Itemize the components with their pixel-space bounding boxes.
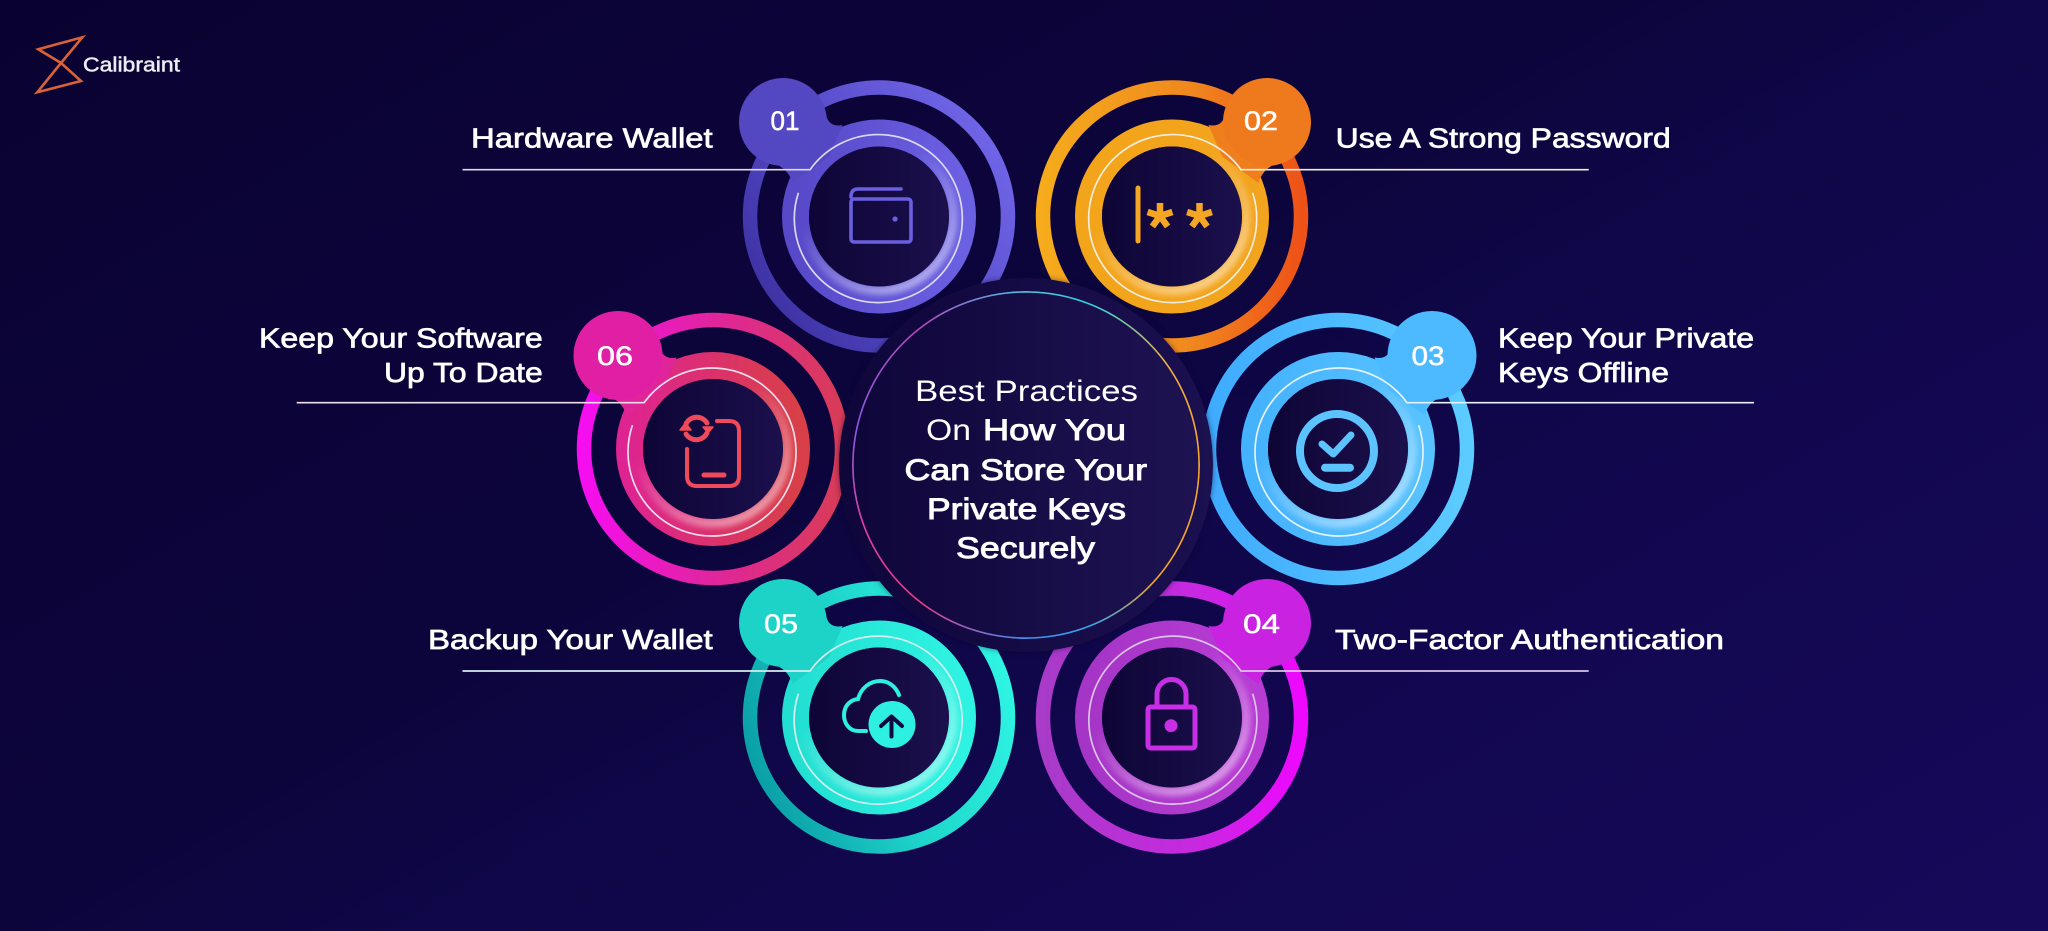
label 03 line 1: Keep Your Private	[1498, 322, 1754, 353]
panel: 06 Keep Your Software Up To Date	[259, 311, 842, 578]
inner disc 01	[809, 146, 949, 286]
center disc	[853, 292, 1198, 637]
outer ring 04	[1043, 588, 1301, 846]
hole bevel 03	[1264, 375, 1412, 523]
badge neck 05	[780, 613, 842, 684]
title line 1: Best Practices	[915, 375, 1138, 408]
inner disc 06	[643, 379, 783, 519]
inner ring 05	[796, 634, 962, 801]
icon: wallet	[851, 189, 911, 242]
panel: 05 Backup Your Wallet	[428, 579, 1008, 846]
hole bevel 01	[805, 142, 953, 290]
label 06 line 2: Up To Date	[384, 357, 543, 388]
number 06: 06	[597, 341, 633, 371]
title line 4: Private Keys	[927, 493, 1126, 526]
leader line 01	[462, 135, 962, 303]
icon: password field	[1138, 188, 1212, 241]
logo wordmark: Calibraint	[83, 54, 181, 76]
icon: offline check	[1300, 414, 1374, 488]
panel: 04 Two-Factor Authentication	[1043, 579, 1724, 846]
panel: 03 Keep Your Private Keys Offline	[1209, 311, 1754, 578]
badge 06	[574, 311, 662, 400]
outer ring 05	[750, 588, 1008, 846]
icon: padlock	[1148, 680, 1195, 748]
inner disc 05	[809, 648, 949, 788]
panel: 02 Use A Strong Password	[1043, 78, 1671, 346]
icon: phone update	[680, 417, 739, 486]
hole bevel 05	[805, 644, 953, 792]
inner ring 06	[630, 366, 796, 532]
title line 3: Can Store Your	[904, 454, 1147, 487]
label 01: Hardware Wallet	[471, 123, 713, 154]
label 06 line 1: Keep Your Software	[259, 322, 543, 353]
number 05: 05	[764, 609, 798, 639]
outer ring 01	[750, 88, 1008, 346]
badge neck 02	[1208, 112, 1272, 183]
logo: Calibraint	[37, 37, 181, 92]
title	[904, 375, 1147, 565]
title line 2 regular: On	[926, 414, 971, 447]
label 02: Use A Strong Password	[1336, 123, 1671, 154]
hole bevel 02	[1098, 142, 1246, 290]
outer ring 02	[1043, 88, 1301, 346]
label 03	[1498, 322, 1754, 388]
center disc halo	[838, 278, 1212, 652]
title line 2 strong: How You	[983, 414, 1126, 447]
leader line 05	[462, 636, 962, 804]
title line 5: Securely	[956, 532, 1095, 565]
leader line 04	[1089, 636, 1589, 804]
number 03: 03	[1412, 341, 1444, 371]
inner ring 02	[1088, 133, 1256, 300]
badge neck 01	[780, 112, 842, 183]
outer ring 03	[1209, 320, 1467, 578]
badge 04	[1223, 579, 1311, 667]
badge 03	[1388, 311, 1476, 400]
icon: Z mark	[37, 37, 82, 92]
badge 01	[739, 78, 827, 166]
hole bevel 04	[1098, 644, 1246, 792]
badge 02	[1223, 78, 1311, 166]
icon: cloud upload	[844, 681, 916, 748]
inner ring 04	[1088, 634, 1256, 801]
panel: 01 Hardware Wallet	[462, 78, 1008, 346]
inner ring 03	[1254, 366, 1422, 532]
badge neck 03	[1374, 344, 1438, 416]
label 04: Two-Factor Authentication	[1335, 624, 1724, 655]
inner disc 04	[1102, 648, 1242, 788]
leader line 03	[1255, 368, 1754, 536]
badge neck 06	[614, 344, 676, 416]
label 03 line 2: Keys Offline	[1498, 357, 1669, 388]
inner disc 02	[1102, 146, 1242, 286]
label 06	[259, 322, 543, 388]
center disc gradient rim	[852, 290, 1200, 638]
inner disc 03	[1268, 379, 1408, 519]
number 01: 01	[770, 106, 800, 136]
badge 05	[739, 579, 827, 667]
leader line 02	[1089, 135, 1589, 303]
number 02: 02	[1244, 106, 1278, 136]
inner ring 01	[796, 133, 962, 300]
leader line 06	[297, 368, 796, 536]
badge neck 04	[1208, 613, 1272, 684]
hole bevel 06	[639, 375, 787, 523]
outer ring 06	[584, 320, 842, 578]
number 04: 04	[1243, 609, 1280, 639]
label 05: Backup Your Wallet	[428, 624, 713, 655]
